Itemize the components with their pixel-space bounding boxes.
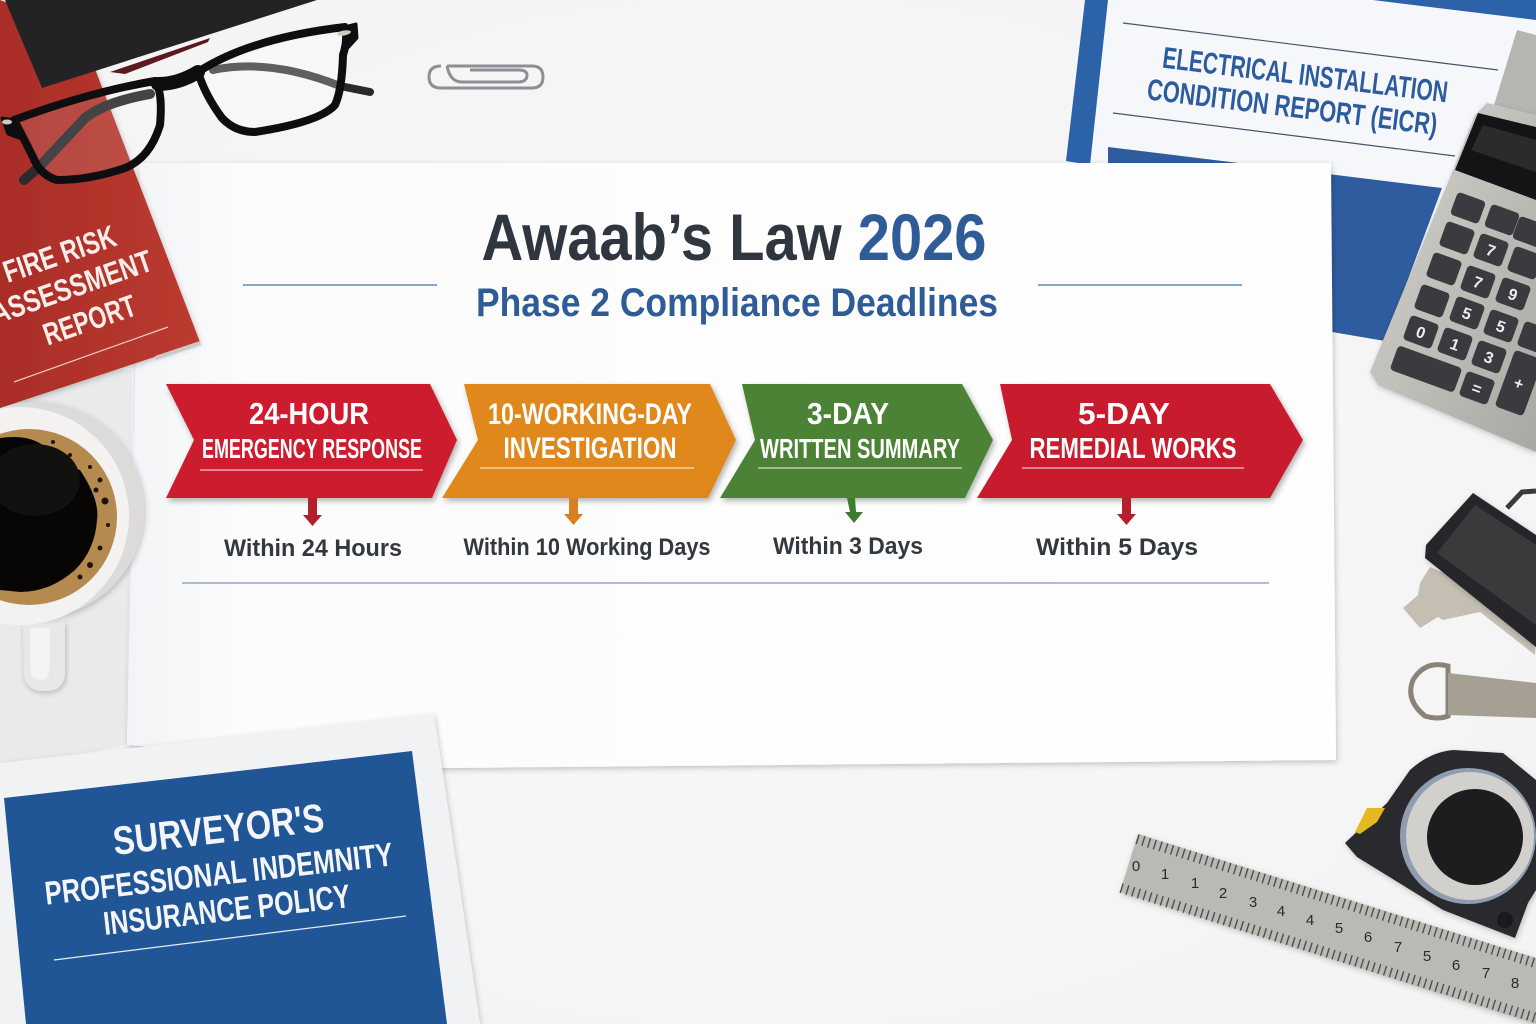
glasses xyxy=(2,24,370,180)
coffee mug xyxy=(0,402,144,691)
step 2: investigation: 10-WORKING-DAY xyxy=(488,398,692,431)
document: surveyor's professional indemnity insurance policy xyxy=(0,714,480,1024)
calculator keys: 7 xyxy=(1470,274,1485,293)
arrow: step 4 xyxy=(1117,498,1136,525)
ruler: 6 xyxy=(1452,957,1460,974)
ruler: 5 xyxy=(1423,948,1431,965)
ruler: 1 xyxy=(1191,875,1199,892)
document: electrical installation condition report: CONDITION REPORT (EICR) xyxy=(1145,73,1439,142)
ruler: 6 xyxy=(1364,929,1372,946)
step 4: remedial works: REMEDIAL WORKS xyxy=(1030,433,1236,465)
padlock and key xyxy=(1403,491,1536,655)
left lens xyxy=(14,81,161,180)
calculator xyxy=(1370,30,1536,452)
key ring xyxy=(1411,665,1536,718)
temple arms xyxy=(213,66,370,92)
calculator keys: 0 xyxy=(1413,324,1428,343)
document: surveyor's professional indemnity insurance policy: PROFESSIONAL INDEMNITY xyxy=(43,835,395,912)
label: within 10 working days: Within 10 Working Days xyxy=(464,534,710,561)
step 4: remedial works xyxy=(977,384,1303,498)
ruler: 8 xyxy=(1511,975,1519,992)
calculator keys: = xyxy=(1469,380,1484,399)
subtitle: Phase 2 Compliance Deadlines xyxy=(476,281,998,325)
calculator keys: 1 xyxy=(1447,336,1462,355)
label: within 5 days: Within 5 Days xyxy=(1036,534,1198,561)
document: surveyor's professional indemnity insurance policy: INSURANCE POLICY xyxy=(101,877,352,942)
document: surveyor's professional indemnity insurance policy: SURVEYOR'S xyxy=(111,796,326,864)
arrow: step 2 xyxy=(564,498,583,525)
arrow: step 3 xyxy=(845,498,863,523)
step 2: investigation: INVESTIGATION xyxy=(504,432,676,465)
calculator keys xyxy=(1390,192,1536,416)
calculator keys: 5 xyxy=(1493,318,1508,337)
bridge xyxy=(158,72,198,84)
ruler xyxy=(1120,834,1536,1024)
step 3: written summary xyxy=(720,384,993,498)
ruler: 7 xyxy=(1482,965,1490,982)
calculator keys: 3 xyxy=(1481,349,1496,368)
document: fire risk assessment report: FIRE RISK xyxy=(0,218,121,290)
step 1: emergency response xyxy=(166,384,457,498)
document: fire risk assessment report: REPORT xyxy=(38,288,141,352)
calculator keys: 7 xyxy=(1483,242,1498,261)
document: fire risk assessment report xyxy=(0,0,201,408)
ruler: 3 xyxy=(1249,894,1257,911)
ruler: 1 xyxy=(1161,866,1169,883)
ruler: 7 xyxy=(1394,939,1402,956)
step 2: investigation xyxy=(442,384,736,498)
notebook xyxy=(5,0,317,88)
right lens xyxy=(198,27,346,132)
tape measure xyxy=(1345,750,1536,938)
step 3: written summary: WRITTEN SUMMARY xyxy=(760,433,960,464)
ruler: 4 xyxy=(1306,912,1314,929)
ruler: 2 xyxy=(1219,885,1227,902)
label: within 24 hours: Within 24 Hours xyxy=(224,535,402,562)
step 4: remedial works: 5-DAY xyxy=(1078,396,1170,431)
step 1: emergency response: 24-HOUR xyxy=(249,396,369,431)
paperclip xyxy=(429,66,543,88)
calculator keys: + xyxy=(1511,375,1526,394)
document: electrical installation condition report xyxy=(1066,0,1536,341)
title: Awaab’s Law 2026 xyxy=(482,200,986,274)
main paper sheet xyxy=(127,163,1336,768)
step 3: written summary: 3-DAY xyxy=(807,396,889,431)
ruler: 0 xyxy=(1132,858,1140,875)
arrow: step 1 xyxy=(303,498,322,526)
calculator keys: 5 xyxy=(1459,305,1474,324)
ruler: 5 xyxy=(1335,920,1343,937)
ruler: 4 xyxy=(1277,903,1285,920)
calculator keys: 9 xyxy=(1505,286,1520,305)
step 1: emergency response: EMERGENCY RESPONSE xyxy=(202,433,422,464)
label: within 3 days: Within 3 Days xyxy=(773,533,923,560)
